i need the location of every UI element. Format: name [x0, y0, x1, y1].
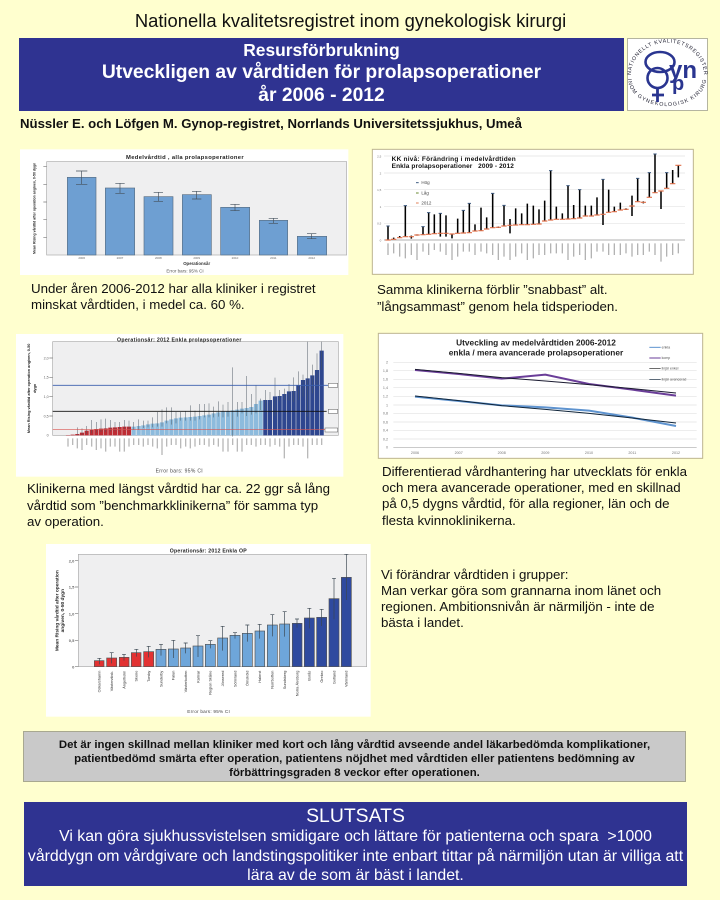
chart: operationsår 2012 enkla OP: Borås [308, 671, 312, 681]
chart: utveckling av medelvårdtiden line chart: 1,2 [383, 395, 388, 399]
range bars [388, 154, 678, 240]
text: right caption 2: och mera avancerade operationer, med en skillnad [382, 480, 681, 495]
text: right caption 3: regionen. Ambitionsnivån är närmiljön - inte de [381, 599, 654, 614]
legend [416, 180, 432, 205]
light blue bars [134, 401, 261, 435]
chart: operationsår 2012 enkla OP: Skene [135, 671, 139, 682]
conclusion panel: lära av de som är bäst i landet. [247, 867, 464, 884]
text: right caption 3 [381, 567, 661, 630]
chart: operationsår 2012 enkla OP: Oskarshamn [98, 671, 102, 692]
chart: operationsår 2012 enkla OP: Västerbotten [184, 671, 188, 692]
chart: operationsår 2012 enkla OP: 0 [72, 664, 75, 669]
chart: KK-nivå förändring: Enkla prolapsoperationer 2009 - 2012 [392, 163, 514, 170]
chart: operationsår 2012 enkla prolapsoperationer: 2,0 [44, 356, 49, 360]
chart: medelvårdtid alla prolapsoperationer: 2006 [78, 256, 85, 260]
chart: operationsår 2012 enkla prolapsoperationer: dygn [33, 383, 37, 393]
chart: operationsår 2012 enkla OP: Halmst [258, 670, 262, 683]
legend: komp [662, 356, 670, 360]
chart: utveckling av medelvårdtiden line chart: 1,6 [383, 378, 388, 382]
chart: utveckling av medelvårdtiden line chart: 0,4 [383, 429, 388, 433]
text: left caption 2: vårdtid som ”benchmarkklinikerna” för samma typ [27, 498, 318, 513]
chart: operationsår 2012 enkla OP: Jönsered [221, 671, 225, 686]
legend: Låg [421, 189, 429, 195]
title: Nationella kvalitetsregistret inom gynekologisk kirurgi [135, 10, 566, 31]
conclusion panel: SLUTSATS [306, 805, 405, 827]
chart: operationsår 2012 enkla OP: Västerviksk. [110, 671, 114, 691]
chart: utveckling av medelvårdtiden line chart: 2006 [411, 451, 419, 455]
text: right caption 3: Vi förändrar vårdtiden i grupper: [381, 567, 568, 582]
chart: medelvårdtid alla prolapsoperationer: Error bars: 95% CI [166, 268, 204, 273]
chart: operationsår 2012 enkla OP: Falun [172, 671, 176, 680]
chart: medelvårdtid alla prolapsoperationer: Mean Rising vårdtid after operation angiven, 0-50 dygn [32, 163, 36, 254]
chart: operationsår 2012 enkla OP: Region Skåne [209, 671, 213, 695]
chart: operationsår 2012 enkla OP: Operationsår: 2012 Enkla OP [170, 548, 247, 555]
error bars [77, 342, 322, 437]
chart: operationsår 2012 enkla prolapsoperationer: 0,5 [44, 414, 49, 418]
text: left caption 2: av operation. [27, 514, 104, 529]
chart: operationsår 2012 enkla OP: Örnsköld [246, 671, 250, 686]
chart: utveckling av medelvårdtiden line chart: 2009 [541, 451, 549, 455]
chart: utveckling av medelvårdtiden line chart: 2010 [585, 451, 593, 455]
chart: operationsår 2012 enkla prolapsoperationer [16, 334, 344, 477]
chart: operationsår 2012 enkla prolapsoperationer: Mean Rising vårdtid after operation angiven, 0-50 [27, 344, 31, 433]
chart: operationsår 2012 enkla OP: Sundsberg [283, 671, 287, 689]
chart: utveckling av medelvårdtiden line chart: 0,6 [383, 420, 388, 424]
chart: operationsår 2012 enkla OP: Torsby [147, 671, 151, 682]
chart: medelvårdtid alla prolapsoperationer: 2008 [155, 256, 162, 260]
chart: operationsår 2012 enkla OP: Sunderby [159, 671, 163, 687]
text: right caption 3: Man verkar göra som grannarna inom länet och [381, 583, 661, 598]
text: left caption 1 [31, 281, 316, 312]
chart: utveckling av medelvårdtiden line chart: 1 [386, 403, 388, 407]
text: right caption 2: Differentierad vårdhantering har utvecklats för enkla [382, 464, 687, 479]
chart: operationsår 2012 enkla prolapsoperationer: Operationsår: 2012 Enkla prolapsoperationer [117, 336, 242, 343]
callout: no difference statement: Det är ingen skillnad mellan kliniker med kort och lång vårdtid avseende andel läkarbedömda komplikationer, [59, 739, 650, 751]
text: right caption 2 [382, 464, 688, 528]
text: right caption 2: flesta kvinnoklinikerna. [382, 513, 516, 528]
header banner: år 2006 - 2012 [258, 85, 385, 106]
conclusion panel: Vi kan göra sjukhussvistelsen smidigare och lättare för patienterna och spara >1000 [59, 828, 652, 845]
chart: operationsår 2012 enkla OP: Kalmar [196, 670, 200, 683]
chart: medelvårdtid alla prolapsoperationer: 2009 [193, 256, 200, 260]
text: right caption 1: ”långsammast” genom hela tidsperioden. [377, 299, 618, 314]
chart: utveckling av medelvårdtiden line chart [378, 332, 704, 459]
chart: operationsår 2012 enkla OP: angiven, 0-50 dygn [60, 589, 66, 632]
chart: utveckling av medelvårdtiden line chart: 0 [386, 446, 388, 450]
chart: operationsår 2012 enkla OP: 2,0 [69, 558, 75, 563]
chart: KK-nivå förändring: 0 [380, 238, 382, 242]
chart heading: KK nivå: Förändring i medelvårdtiden [392, 155, 516, 163]
chart: utveckling av medelvårdtiden line chart: 2011 [628, 451, 636, 455]
text: right caption 2: på 0,5 dygns vårdtid, för alla regioner, län och de [382, 496, 670, 511]
chart: KK-nivå förändring: 1 [380, 205, 382, 209]
chart: operationsår 2012 enkla prolapsoperationer: 1,0 [44, 395, 49, 399]
chart: utveckling av medelvårdtiden line chart: 0,2 [383, 437, 388, 441]
legend: enkla [662, 345, 670, 349]
chart: utveckling av medelvårdtiden line chart: 2 [386, 361, 388, 365]
chart: operationsår 2012 enkla OP: 1,5 [69, 585, 75, 590]
chart: operationsår 2012 enkla OP: Mean Rising vårdtid after operation [53, 570, 60, 651]
chart: utveckling av medelvårdtiden line chart: 2007 [455, 451, 463, 455]
chart: medelvårdtid alla prolapsoperationer: Operationsår [183, 261, 210, 266]
chart: operationsår 2012 enkla OP [46, 544, 371, 717]
chart: KK-nivå förändring: 2 [380, 171, 382, 175]
chart: operationsår 2012 enkla OP: Norra Älvsborg [295, 671, 299, 696]
authors line: Nüssler E. och Löfgen M. Gynop-registret, Norrlands Universitetssjukhus, Umeå [20, 116, 522, 131]
conclusion panel: vårddygn om vårdgivare och landstingspolitiker inte enbart tittar på närmiljön utan är villiga att [28, 848, 683, 864]
legend: linjär avancerad [662, 377, 686, 381]
legend: linjär enkel [662, 367, 679, 371]
legend [649, 345, 686, 381]
dark blue bars [265, 351, 322, 435]
text: right caption 3: bästa i landet. [381, 615, 464, 630]
chart: operationsår 2012 enkla OP: Error bars: 95% CI [187, 709, 230, 714]
chart: operationsår 2012 enkla prolapsoperationer: Error bars: 95% CI [156, 469, 203, 475]
2012 markers [385, 165, 681, 240]
callout: no difference statement: patientbedömd smärta efter operation, patientens nöjdhet med vårdtiden eller patientens bedömning av [74, 753, 635, 765]
chart: KK-nivå förändring: 0,5 [377, 222, 382, 226]
chart: operationsår 2012 enkla prolapsoperationer: 0 [47, 434, 49, 438]
header banner: Resursförbrukning [243, 40, 400, 60]
chart: utveckling av medelvårdtiden line chart: 1,4 [383, 386, 388, 390]
chart: operationsår 2012 enkla OP: Sörmland [233, 671, 237, 687]
chart: operationsår 2012 enkla OP: Värmland [345, 671, 349, 687]
legend: 2012 [421, 200, 432, 205]
chart: medelvårdtid alla prolapsoperationer: 2012 [308, 256, 315, 260]
icon: GynOp logo: p [672, 73, 684, 95]
chart: medelvårdtid alla prolapsoperationer: Medelvårdtid , alla prolapsoperationer [126, 154, 244, 161]
chart: operationsår 2012 enkla OP: Örebro [320, 671, 324, 683]
red bars [68, 427, 129, 435]
chart: utveckling av medelvårdtiden line chart: enkla / mera avancerade prolapsoperationer [449, 348, 624, 358]
chart: utveckling av medelvårdtiden line chart: 1,8 [383, 369, 388, 373]
callout: no difference statement [23, 731, 686, 782]
text: left caption 1: Under åren 2006-2012 har alla kliniker i registret [31, 281, 316, 296]
text: left caption 1: minskat vårdtiden, i medel ca. 60 %. [31, 297, 245, 312]
chart: medelvårdtid alla prolapsoperationer: 2010 [232, 256, 239, 260]
site labels, illegible [388, 243, 678, 262]
chart: operationsår 2012 enkla OP: 0,5 [69, 638, 75, 643]
header banner [19, 38, 624, 111]
chart: operationsår 2012 enkla OP: Norrbotten [270, 671, 274, 689]
chart: medelvårdtid alla prolapsoperationer [20, 149, 348, 275]
chart: operationsår 2012 enkla prolapsoperationer: 1,5 [44, 376, 49, 380]
header banner: Utveckligen av vårdtiden för prolapsoperationer [102, 62, 541, 83]
chart: operationsår 2012 enkla OP: Gotland [332, 671, 336, 684]
chart: utveckling av medelvårdtiden line chart: 0,8 [383, 412, 388, 416]
text: left caption 2: Klinikerna med längst vårdtid har ca. 22 ggr så lång [27, 481, 330, 496]
callout: no difference statement: förbättringsgraden 8 veckor efter operationen. [229, 767, 480, 779]
icon: GynOp logo: yn [669, 57, 697, 84]
legend: Hög [421, 180, 430, 185]
text: right caption 1: Samma klinikerna förblir ”snabbast” alt. [377, 282, 608, 297]
chart: medelvårdtid alla prolapsoperationer: 2007 [117, 256, 124, 260]
text: right caption 1 [377, 282, 618, 314]
chart: KK-nivå förändring: 2,5 [377, 154, 382, 158]
chart: KK-nivå förändring [372, 148, 694, 275]
text: left caption 2 [27, 481, 330, 529]
conclusion panel [24, 802, 687, 886]
chart: utveckling av medelvårdtiden line chart: 2012 [672, 451, 680, 455]
chart: KK-nivå förändring: 1,5 [377, 188, 382, 192]
chart: utveckling av medelvårdtiden line chart: 2008 [498, 451, 506, 455]
chart: medelvårdtid alla prolapsoperationer: 2011 [270, 256, 277, 260]
chart: operationsår 2012 enkla OP: Ängelholm [122, 671, 126, 689]
chart: utveckling av medelvårdtiden line chart: Utveckling av medelvårdtiden 2006-2012 [456, 337, 616, 347]
chart: operationsår 2012 enkla OP: 1,0 [69, 611, 75, 616]
icon: GynOp logo: NATIONELLT KVALITETSREGISTER [627, 38, 708, 75]
